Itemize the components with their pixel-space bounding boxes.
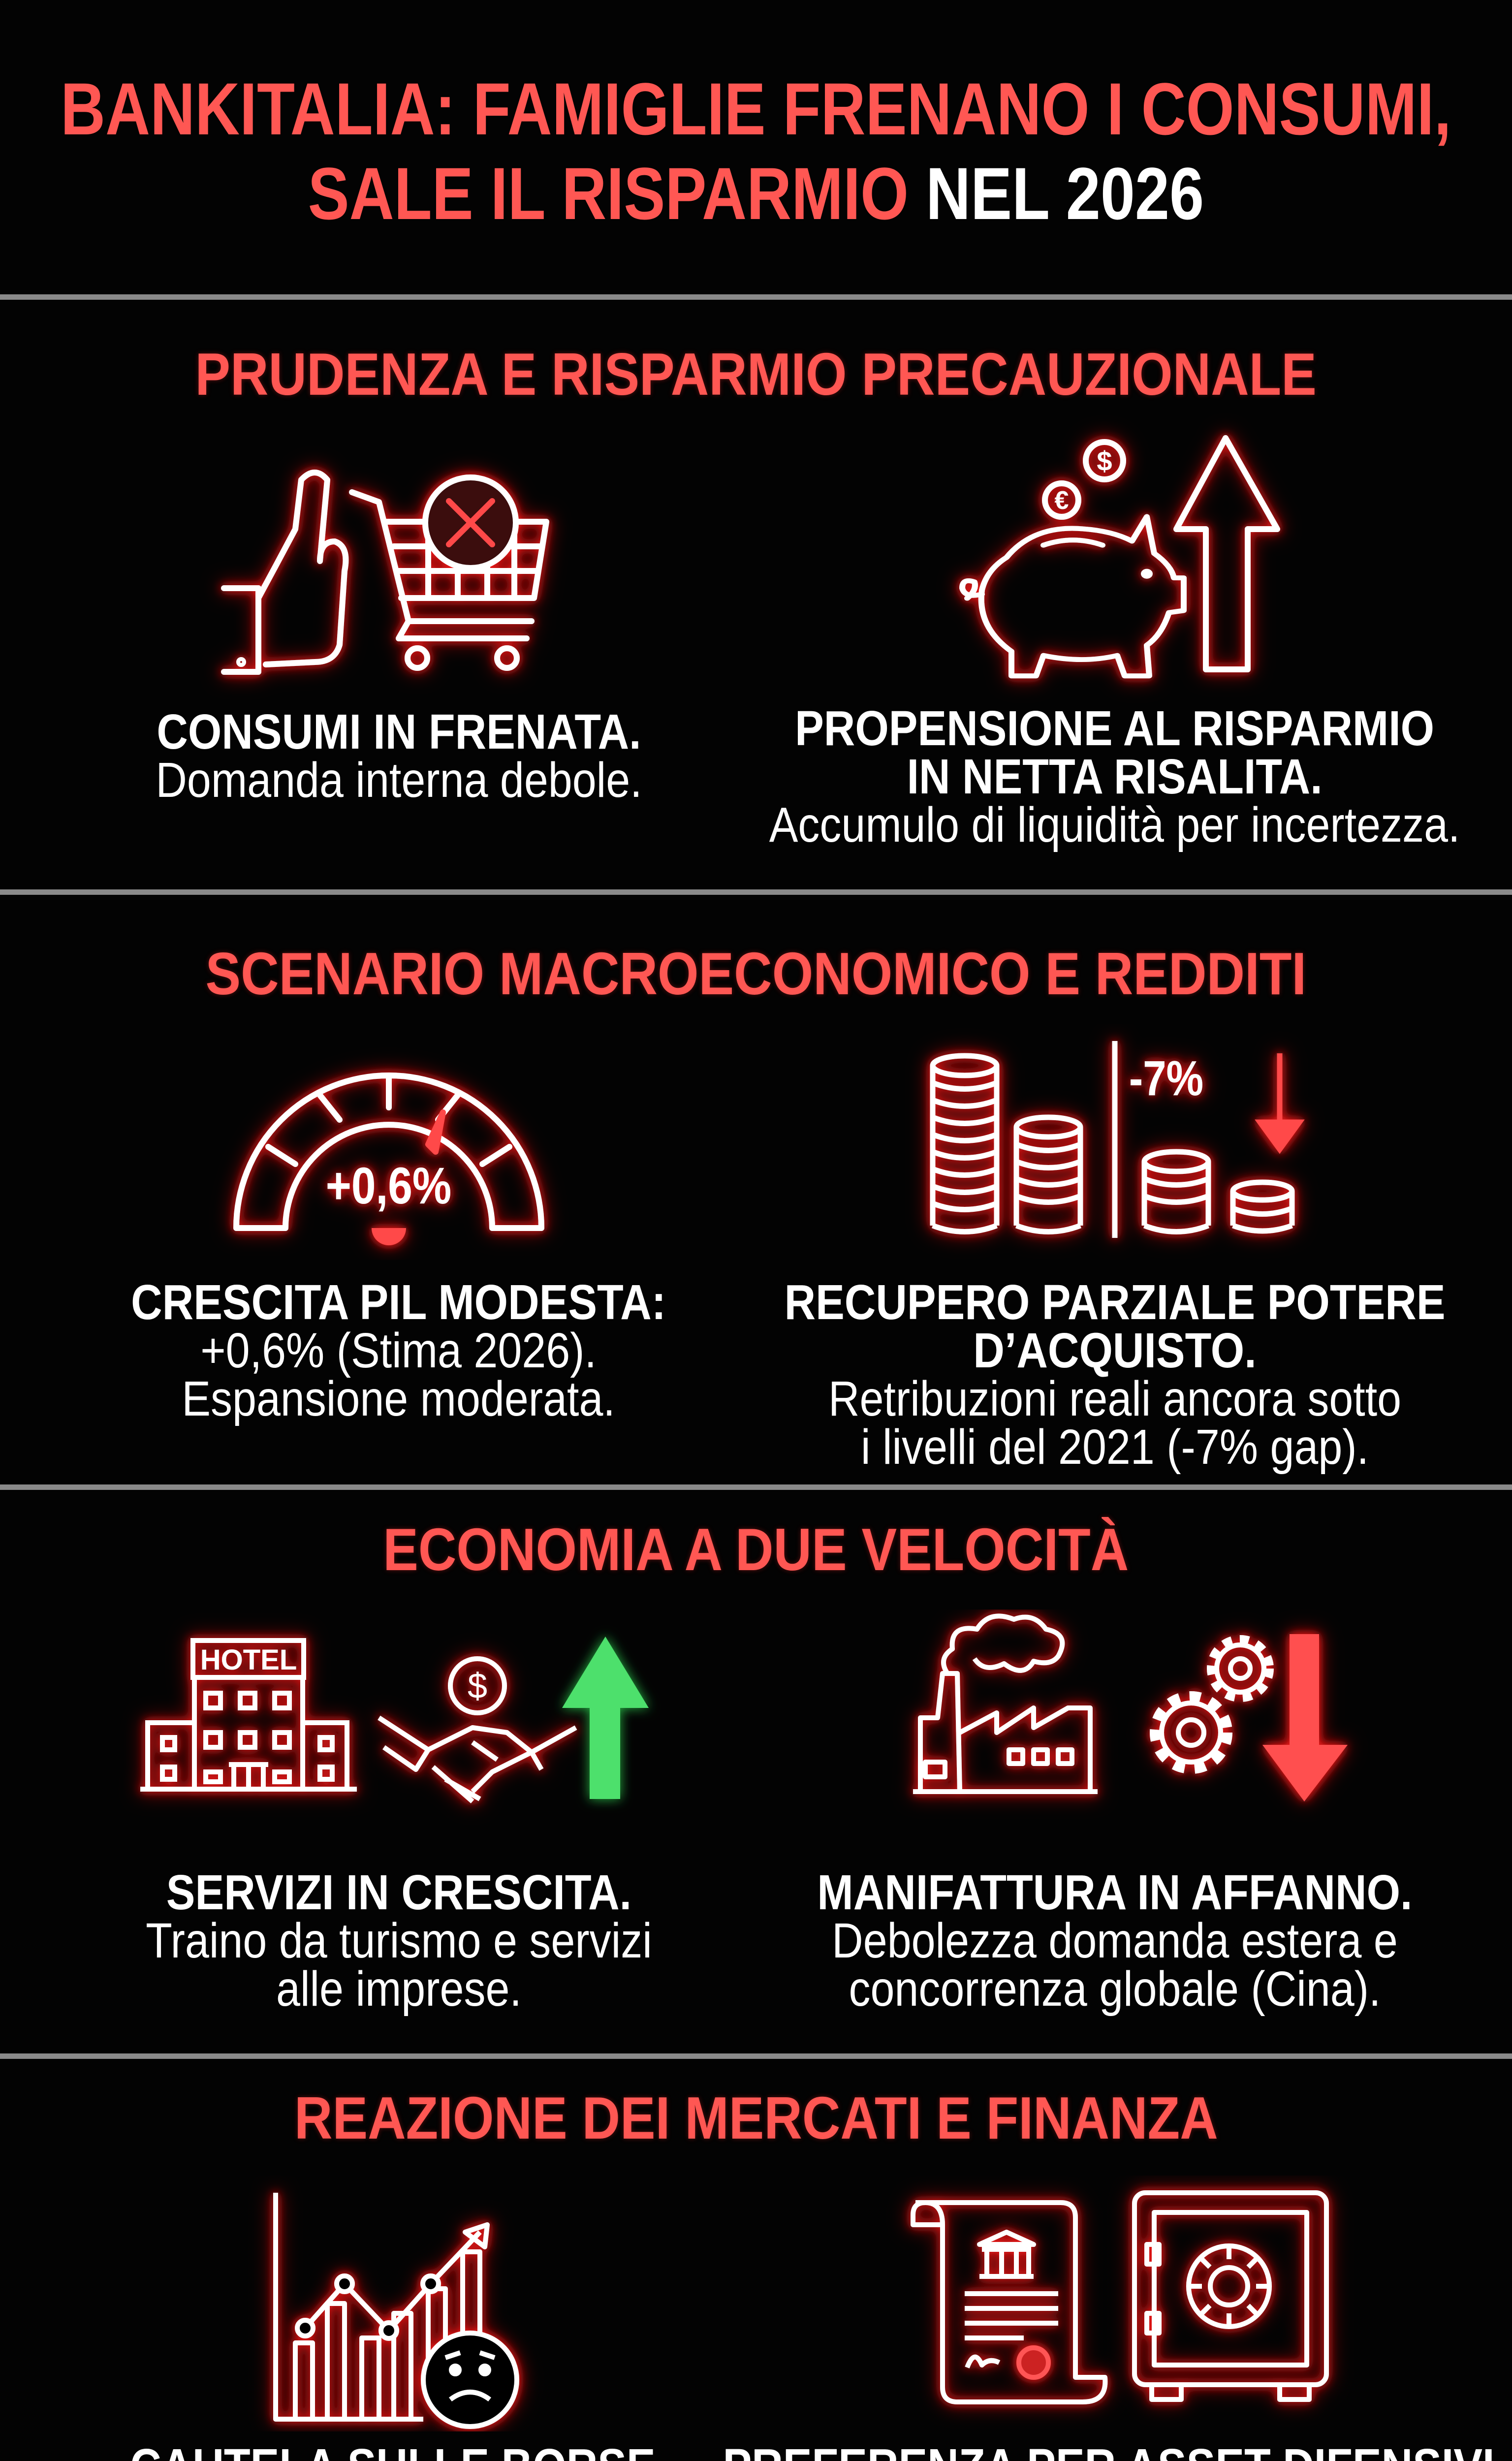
heading: prudenza: PRUDENZA E RISPARMIO PRECAUZIONALE xyxy=(195,341,1317,408)
text: manifattura xyxy=(753,1868,1477,2013)
text: crescita pil: +0,6% (Stima 2026). xyxy=(201,1323,597,1378)
text: consumi xyxy=(156,704,642,808)
text: propensione: PROPENSIONE AL RISPARMIO xyxy=(795,701,1434,756)
icon: gauge: +0,6% xyxy=(326,1157,451,1215)
text: manifattura: Debolezza domanda estera e xyxy=(832,1913,1398,1968)
text: servizi: Traino da turismo e servizi xyxy=(146,1913,652,1968)
heading: scenario: SCENARIO MACROECONOMICO E REDDITI xyxy=(206,940,1306,1007)
icon: red down arrow xyxy=(1262,1634,1348,1801)
text: potere acquisto: D’ACQUISTO. xyxy=(973,1323,1257,1378)
icon: hotel xyxy=(140,1641,357,1789)
heading: mercati: REAZIONE DEI MERCATI E FINANZA xyxy=(294,2084,1218,2151)
icon: piggy bank and arrow xyxy=(962,438,1277,676)
text: propensione xyxy=(769,701,1460,852)
text: potere acquisto: Retribuzioni reali ancora sotto xyxy=(828,1371,1401,1426)
icon: scroll bond xyxy=(913,2203,1105,2402)
text: potere acquisto xyxy=(785,1275,1445,1475)
text: consumi: CONSUMI IN FRENATA. xyxy=(157,704,641,759)
title: BANKITALIA: FAMIGLIE FRENANO I CONSUMI, xyxy=(61,67,1451,150)
text: crescita pil xyxy=(131,1275,666,1426)
icon: piggy bank and arrow: $ xyxy=(1097,445,1112,476)
title xyxy=(61,67,1451,235)
icon: green up arrow xyxy=(562,1637,649,1799)
icon: gears xyxy=(1156,1640,1269,1768)
text: potere acquisto: RECUPERO PARZIALE POTERE xyxy=(785,1275,1445,1330)
icon: coin stacks xyxy=(933,1041,1299,1238)
text: servizi: alle imprese. xyxy=(276,1961,521,2017)
text: manifattura: concorrenza globale (Cina). xyxy=(849,1961,1381,2017)
text: servizi xyxy=(146,1865,652,2017)
text: servizi: SERVIZI IN CRESCITA. xyxy=(166,1865,631,1920)
icon: chart with sad face xyxy=(276,2193,517,2427)
title: SALE IL RISPARMIO NEL 2026 xyxy=(308,152,1204,235)
text: crescita pil: CRESCITA PIL MODESTA: xyxy=(131,1275,666,1330)
icon: safe xyxy=(1134,2193,1326,2399)
text: potere acquisto: i livelli del 2021 (-7% gap). xyxy=(861,1420,1369,1475)
text: manifattura: MANIFATTURA IN AFFANNO. xyxy=(817,1865,1413,1920)
icon: handshake with coin xyxy=(379,1659,576,1801)
icon: hotel: HOTEL xyxy=(200,1644,297,1676)
text: propensione: IN NETTA RISALITA. xyxy=(907,749,1323,804)
text: consumi: Domanda interna debole. xyxy=(156,753,642,808)
text: propensione: Accumulo di liquidità per incertezza. xyxy=(769,797,1460,852)
icon: factory xyxy=(913,1616,1098,1792)
icon: piggy bank and arrow: € xyxy=(1055,486,1069,515)
text: crescita pil: Espansione moderata. xyxy=(182,1371,615,1426)
icon: handshake with coin: $ xyxy=(468,1667,487,1706)
icon: gauge xyxy=(236,1075,541,1245)
heading: due velocita: ECONOMIA A DUE VELOCITÀ xyxy=(383,1516,1129,1583)
icon: coin stacks: -7% xyxy=(1129,1050,1203,1106)
icon: hand and cart xyxy=(224,473,546,672)
